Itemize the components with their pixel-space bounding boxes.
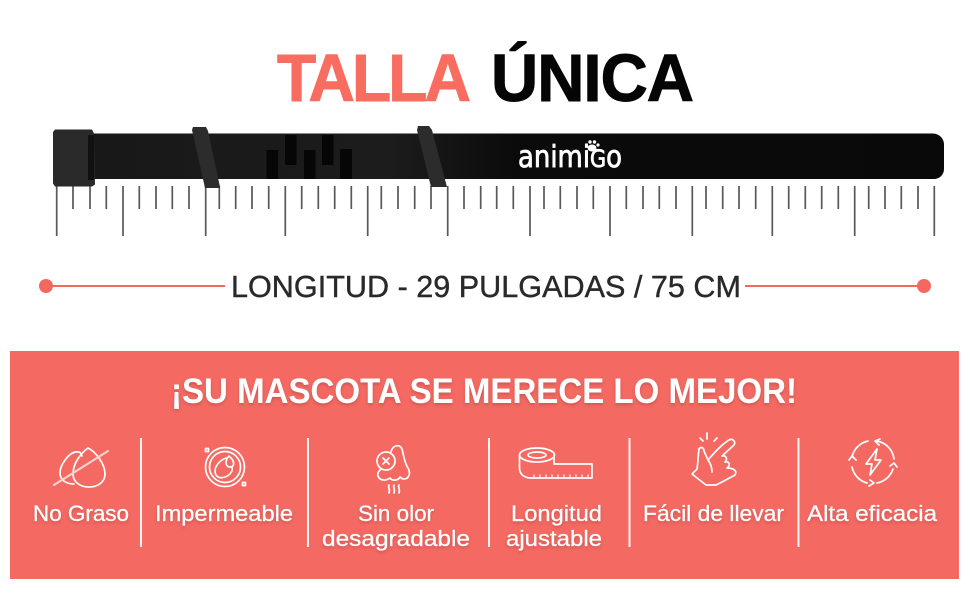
label bbox=[506, 501, 602, 551]
label: Impermeable bbox=[155, 501, 293, 526]
label bbox=[322, 501, 470, 551]
label: Fácil de llevar bbox=[643, 501, 784, 526]
label: Longitud bbox=[511, 501, 602, 526]
length measure bbox=[39, 269, 931, 304]
icon: crossed oil drops bbox=[54, 448, 108, 487]
item: no graso bbox=[33, 448, 129, 526]
icon: snapping hand bbox=[692, 433, 736, 485]
strap slots bbox=[266, 135, 352, 179]
icon: nose with odor bbox=[377, 446, 409, 493]
ruler ticks bbox=[57, 186, 934, 236]
measure text: LONGITUD - 29 PULGADAS / 75 CM bbox=[231, 269, 741, 304]
item: longitud ajustable bbox=[506, 448, 602, 551]
strap loop left bbox=[192, 127, 220, 188]
title: TALLA bbox=[277, 41, 470, 116]
icon: energy cycle bbox=[849, 439, 897, 486]
strap band bbox=[90, 134, 944, 179]
measure line right bbox=[745, 279, 931, 293]
title: ÚNICA bbox=[491, 41, 693, 116]
measure line left bbox=[39, 279, 225, 293]
label: Sin olor bbox=[358, 501, 434, 526]
label: desagradable bbox=[322, 526, 470, 551]
label: ajustable bbox=[506, 526, 602, 551]
item: facil de llevar bbox=[643, 433, 784, 526]
item: alta eficacia bbox=[807, 439, 938, 526]
buckle bbox=[53, 130, 95, 186]
panel background bbox=[10, 351, 959, 579]
label: No Graso bbox=[33, 501, 129, 526]
icon: measuring tape bbox=[520, 448, 592, 478]
title bbox=[277, 41, 693, 116]
panel: benefits bbox=[10, 351, 959, 579]
logo: animiGo bbox=[518, 140, 622, 175]
dividers bbox=[140, 438, 800, 547]
label: Alta eficacia bbox=[807, 501, 938, 526]
heading: ¡SU MASCOTA SE MERECE LO MEJOR! bbox=[171, 372, 797, 411]
item: impermeable bbox=[155, 448, 293, 526]
icon: water drops in circle bbox=[206, 448, 246, 486]
strap loop right bbox=[417, 126, 447, 187]
icon: paw bbox=[585, 140, 600, 152]
item: sin olor bbox=[322, 446, 470, 551]
collar strap bbox=[53, 126, 944, 188]
